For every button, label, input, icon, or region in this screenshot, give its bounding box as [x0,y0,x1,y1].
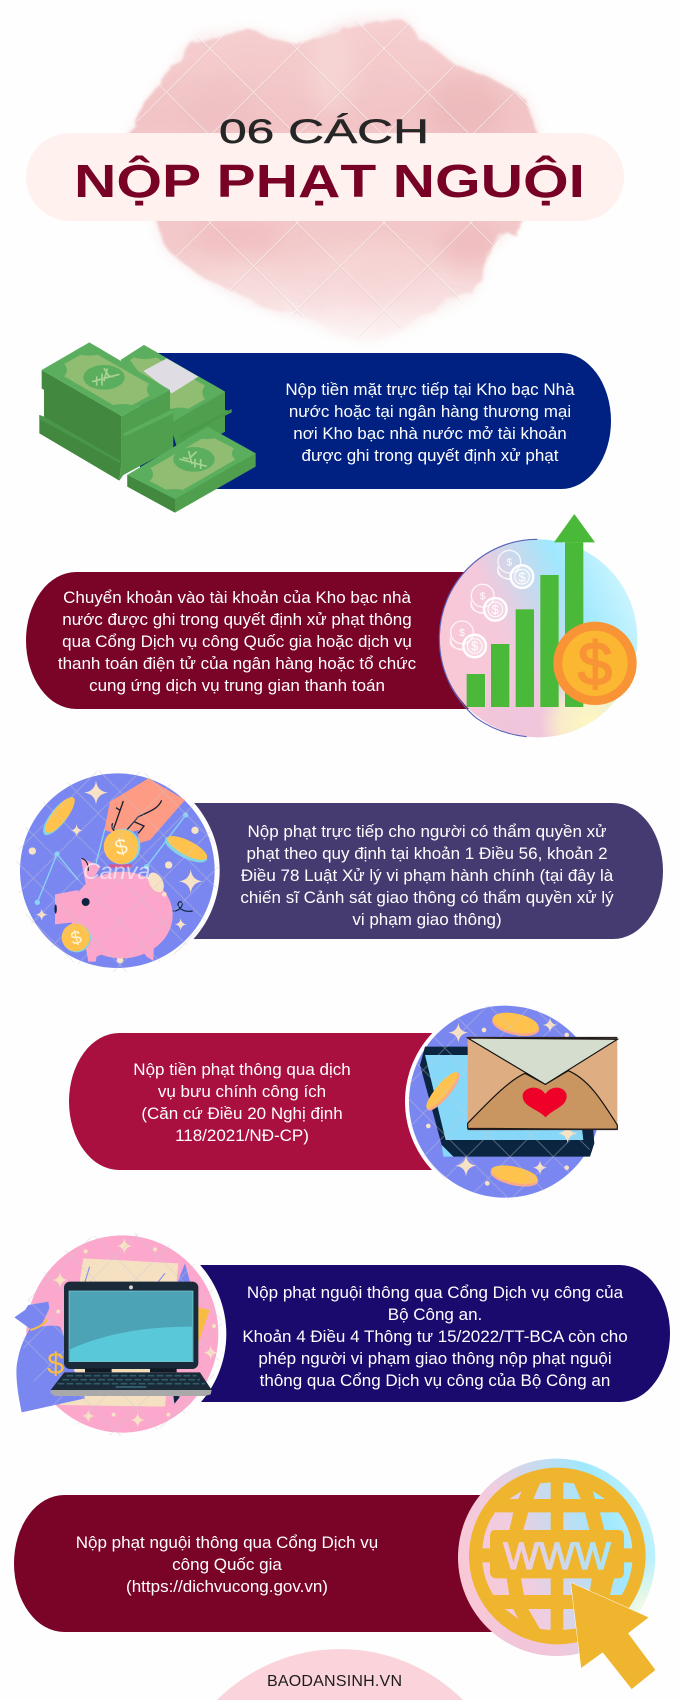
pill 4 [69,1033,520,1170]
text 5: phép người vi phạm giao thông nộp phạt nguội [258,1349,612,1368]
coin in slot [104,829,140,865]
panel 5: Ministry of Public Security portal [14,1230,670,1438]
title line 2: NỘP PHẠT NGUỘI [74,155,585,207]
watermark lattice [16,769,219,972]
panel 6: national public service portal [14,1459,656,1689]
title line 1: 06 CÁCH [219,113,429,151]
text 3: Điều 78 Luật Xử lý vi phạm hành chính (tại đây là [241,866,614,885]
pill 2 [26,572,530,709]
text 1: Nộp tiền mặt trực tiếp tại Kho bạc Nhà [285,380,575,399]
text 1: được ghi trong quyết định xử phạt [302,446,559,465]
icon: piggy bank: $ [68,926,84,949]
icon: envelope and tablet [405,1002,617,1202]
panel 3: pay to authorized officer [15,768,663,973]
small coin stack 1: $ [507,557,513,568]
title [74,113,585,207]
hand [104,778,185,843]
text 2: thanh toán điện tử của ngân hàng hoặc tổ chức [58,654,417,673]
text 2: qua Cổng Dịch vụ công Quốc gia hoặc dịch vụ [62,632,412,651]
watermark word: Canva [83,858,150,884]
money bag [16,1326,85,1412]
www letters: WWW [503,1535,611,1578]
icon: piggy bank [15,768,220,973]
title pill [26,133,624,221]
cursor arrow [571,1582,656,1689]
laptop [64,1282,198,1369]
coins [490,1010,541,1040]
text 3: phạt theo quy định tại khoản 1 Điều 56, khoản 2 [246,844,608,863]
text 4: 118/2021/NĐ-CP) [175,1126,309,1145]
text 6: Nộp phạt nguội thông qua Cổng Dịch vụ [76,1533,378,1552]
text 5: Khoản 4 Điều 4 Thông tư 15/2022/TT-BCA còn cho [242,1327,628,1346]
small coin stack 2: $ [480,591,486,602]
large dollar coin [553,622,637,705]
text 5: Nộp phạt nguội thông qua Cổng Dịch vụ công của [247,1283,624,1302]
text 2: Chuyển khoản vào tài khoản của Kho bạc nhà [63,588,411,607]
pill 5 [110,1265,670,1402]
text 2: cung ứng dịch vụ trung gian thanh toán [89,676,385,695]
footer semicircle [217,1649,463,1700]
text 1: nước hoặc tại ngân hàng thương mại [289,402,571,421]
large dollar coin: $ [578,630,612,699]
small coin stack 3: $ [459,628,465,639]
pill 6 [14,1495,550,1632]
panel 4: postal service [69,1002,617,1202]
pill 3 [110,803,663,939]
falling coins [38,794,79,839]
text 3: chiến sĩ Cảnh sát giao thông có thẩm quyền xử lý [240,888,614,907]
text 5: Bộ Công an. [388,1305,482,1324]
icon: www globe with cursor [458,1459,656,1689]
pill 1 [140,353,611,489]
panel 1: cash payment [39,342,611,513]
small coin stack 3: $ [471,640,478,654]
text 6: (https://dichvucong.gov.vn) [126,1577,328,1596]
text 1: nơi Kho bạc nhà nước mở tài khoản [293,424,567,443]
footer source label: BAODANSINH.VN [267,1673,402,1690]
icon: growth chart with coin [439,514,637,737]
small coin stack 1: $ [518,570,526,584]
text 5: thông qua Cổng Dịch vụ công của Bộ Công an [260,1371,610,1390]
text 6: công Quốc gia [172,1555,282,1574]
text 4: Nộp tiền phạt thông qua dịch [133,1060,351,1079]
text 2: nước được ghi trong quyết định xử phạt thông [62,610,412,629]
text 3: vi phạm giao thông) [352,910,502,929]
small coin stack 3 [450,621,486,657]
watercolor blot behind title [120,10,550,345]
small coin stack 2: $ [492,603,499,617]
pig body [55,858,173,962]
panel 2: bank transfer [26,514,637,737]
small coin stack 2 [471,584,507,621]
icon: stacks of banknotes [39,342,256,513]
small coin stack 1 [498,550,533,588]
icon: piggy bank: $ [112,833,130,860]
icon: laptop and money bag [14,1230,226,1438]
envelope [468,1037,617,1130]
text 4: vụ bưu chính công ích [158,1082,326,1101]
text 4: (Căn cứ Điều 20 Nghị định [141,1104,343,1123]
icon: laptop and money bag: $ [47,1347,64,1381]
text 3: Nộp phạt trực tiếp cho người có thẩm quyền xử [247,822,607,841]
